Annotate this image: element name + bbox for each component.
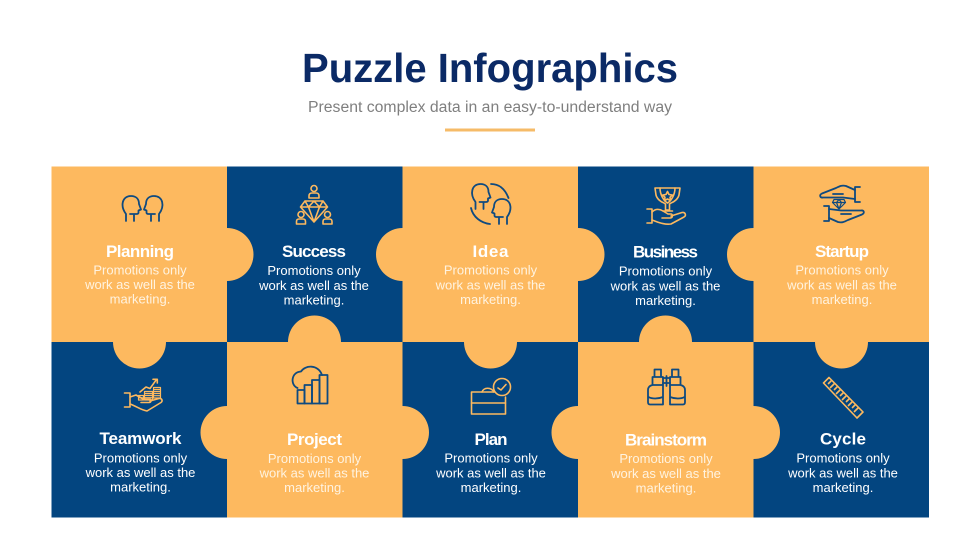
title underline accent [445,128,535,132]
icon: cake box with clock [472,378,510,414]
panel: Planning [52,166,254,368]
heading: Planning [106,242,174,261]
icon: two heads facing [123,196,162,221]
description: marketing. [636,480,696,496]
description: work as well as the [435,278,545,292]
description: Promotions only [444,450,538,466]
panel: Startup [727,166,929,368]
description: marketing. [460,292,521,307]
icon: two heads with cycle arcs [471,184,510,224]
icon: cloud with bar chart [293,367,328,404]
heading: Project [287,430,342,449]
description: work as well as the [786,278,897,292]
description: work as well as the [435,466,546,480]
description: marketing. [812,292,872,307]
icon: hands holding diamond [820,186,864,222]
panel: Project [201,316,429,518]
heading: Idea [472,242,509,261]
description: marketing. [110,292,170,306]
description: work as well as the [259,466,369,480]
description: work as well as the [84,277,195,292]
icon: ruler [824,378,863,418]
panel: Success [227,166,402,342]
description: work as well as the [610,466,721,481]
description: work as well as the [85,465,195,480]
panel: Idea [376,166,604,368]
title: Puzzle Infographics [302,45,678,91]
heading: Startup [815,242,869,261]
description: Promotions only [94,450,188,466]
icon: people around diamond [296,186,332,224]
panel: Plan [402,342,578,518]
icon: trophy on hand [647,188,685,224]
panel: Brainstorm [552,316,780,518]
description: Promotions only [619,264,713,278]
description: marketing. [284,480,345,495]
icon: binoculars [648,370,685,404]
description: Promotions only [267,263,361,278]
description: Promotions only [795,262,889,278]
description: Promotions only [796,450,890,466]
description: marketing. [813,480,873,495]
description: Promotions only [268,451,362,466]
description: work as well as the [787,466,898,480]
heading: Cycle [820,430,866,448]
description: marketing. [110,480,171,494]
icon: hand holding growing coins [124,379,162,411]
subtitle: Present complex data in an easy-to-understand way [308,99,672,116]
heading: Teamwork [100,429,182,448]
description: Promotions only [619,451,713,466]
heading: Success [282,242,346,261]
description: Promotions only [93,262,187,278]
description: Promotions only [444,262,538,278]
heading: Business [633,242,698,262]
description: marketing. [635,293,696,308]
description: work as well as the [258,278,369,293]
panel: Teamwork [52,342,227,518]
panel: Business [578,166,754,342]
description: marketing. [284,292,344,308]
heading: Brainstorm [625,430,707,450]
description: marketing. [461,480,521,495]
panel: Cycle [754,342,929,518]
heading: Plan [474,430,508,449]
description: work as well as the [610,278,720,294]
